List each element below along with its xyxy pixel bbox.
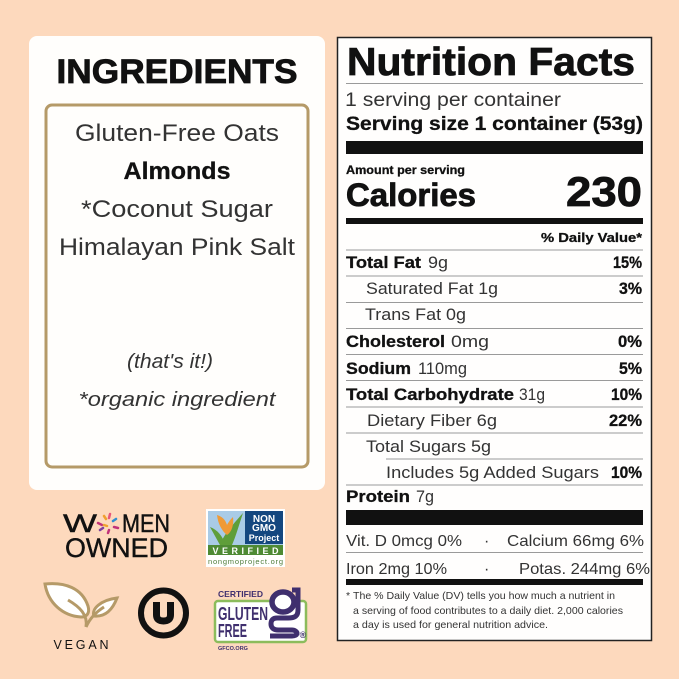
logo: non-gmo project verified: NON: [253, 514, 275, 525]
row: total fat: [346, 253, 642, 272]
row: total fat: 9g: [428, 253, 448, 272]
row: total fat: 15%: [613, 253, 642, 272]
row: vitamin d and calcium: ·: [484, 533, 489, 550]
row: dietary fiber: Dietary Fiber 6g: [367, 411, 497, 430]
row: added sugars: 10%: [611, 463, 642, 482]
thick bar: [346, 141, 643, 154]
logo: non-gmo project verified: GMO: [252, 523, 276, 534]
logo: women owned: W: [63, 510, 98, 538]
logo: certified gluten free: CERTIFIED: [218, 589, 263, 599]
row: iron and potassium: Iron 2mg 10%: [346, 561, 447, 578]
logo: women owned: MEN: [122, 510, 170, 538]
ingredient list: Almonds: [124, 158, 230, 185]
row: dietary fiber: [367, 411, 642, 430]
row: protein: Protein: [346, 487, 410, 506]
gold frame: [46, 105, 308, 467]
calories: [346, 163, 642, 215]
row: cholesterol: 0%: [618, 332, 642, 351]
footnote: *: [346, 590, 350, 602]
panel: ingredients: [29, 36, 325, 490]
ingredient list: *Coconut Sugar: [81, 196, 273, 223]
logo: certified gluten free: ®: [300, 630, 307, 640]
row: cholesterol: [346, 332, 642, 351]
row: vitamin d and calcium: [346, 533, 644, 550]
ingredient list: Gluten-Free Oats: [75, 120, 279, 147]
row: vitamin d and calcium: Vit. D 0mcg 0%: [346, 533, 462, 550]
logo: vegan leaf: [45, 584, 117, 652]
heading: ingredients: INGREDIENTS: [56, 53, 298, 91]
logo: women owned: [63, 510, 170, 563]
row: trans fat: Trans Fat 0g: [365, 305, 466, 324]
logo: women owned: OWNED: [65, 533, 168, 563]
row: added sugars: Includes 5g Added Sugars: [386, 463, 599, 482]
row: saturated fat: [366, 279, 642, 298]
logo: vegan leaf: VEGAN: [54, 638, 108, 652]
row: total fat: Total Fat: [346, 253, 421, 272]
panel: nutrition facts: [338, 38, 652, 640]
row: iron and potassium: [346, 561, 650, 578]
row: iron and potassium: Potas. 244mg 6%: [519, 561, 650, 578]
row: total carbohydrate: [346, 385, 642, 404]
serving info: 1 serving per container: [345, 89, 562, 111]
row: saturated fat: 3%: [619, 279, 642, 298]
row: saturated fat: Saturated Fat 1g: [366, 279, 498, 298]
row: iron and potassium: ·: [484, 561, 489, 578]
row: total carbohydrate: Total Carbohydrate: [346, 385, 514, 404]
logo: non-gmo project verified: VERIFIED: [212, 546, 279, 556]
logo: kosher orthodox union: [141, 590, 186, 636]
row: total carbohydrate: 31g: [519, 385, 545, 404]
row: cholesterol: 0mg: [451, 332, 489, 351]
logo: certified gluten free: FREE: [218, 621, 247, 641]
row: sodium: 5%: [619, 359, 642, 378]
row: cholesterol: Cholesterol: [346, 332, 445, 351]
row: total carbohydrate: 10%: [611, 385, 642, 404]
footnote: a day is used for general nutrition advice.: [353, 619, 548, 631]
serving info: Serving size 1 container (53g): [346, 113, 643, 135]
logo: non-gmo project verified: [206, 509, 285, 567]
ingredient list: [59, 120, 295, 261]
calories: Calories: [346, 177, 476, 213]
row: sodium: [346, 359, 642, 378]
thick bar: [346, 579, 643, 585]
logo: non-gmo project verified: nongmoproject.org: [208, 557, 283, 566]
row: total sugars: Total Sugars 5g: [366, 437, 491, 456]
logo: certified gluten free: GLUTEN: [218, 604, 268, 624]
footnote: [346, 590, 623, 631]
row: vitamin d and calcium: Calcium 66mg 6%: [507, 533, 644, 550]
row: dietary fiber: 22%: [609, 411, 642, 430]
nutrition title: Nutrition Facts: [347, 41, 635, 84]
logo: certified gluten free: GFCO.ORG: [218, 646, 248, 652]
thick bar: [346, 218, 643, 224]
row: protein: 7g: [416, 487, 434, 506]
note: that's it: (that's it!): [127, 351, 213, 373]
calories: 230: [566, 168, 642, 215]
logo: non-gmo project verified: Project: [249, 533, 279, 543]
row: sodium: Sodium: [346, 359, 411, 378]
row: protein: [346, 487, 434, 506]
footnote: a serving of food contributes to a daily diet. 2,000 calories: [353, 605, 623, 617]
ingredient list: Himalayan Pink Salt: [59, 234, 295, 261]
daily value heading: % Daily Value*: [541, 230, 643, 245]
logo: certified gluten free: [215, 589, 307, 652]
serving info: [345, 89, 643, 135]
calories: Amount per serving: [346, 163, 465, 177]
thick bar: [346, 510, 643, 525]
note: organic ingredient: *organic ingredient: [78, 389, 277, 411]
footnote: The % Daily Value (DV) tells you how much a nutrient in: [353, 590, 615, 602]
row: sodium: 110mg: [418, 359, 467, 378]
